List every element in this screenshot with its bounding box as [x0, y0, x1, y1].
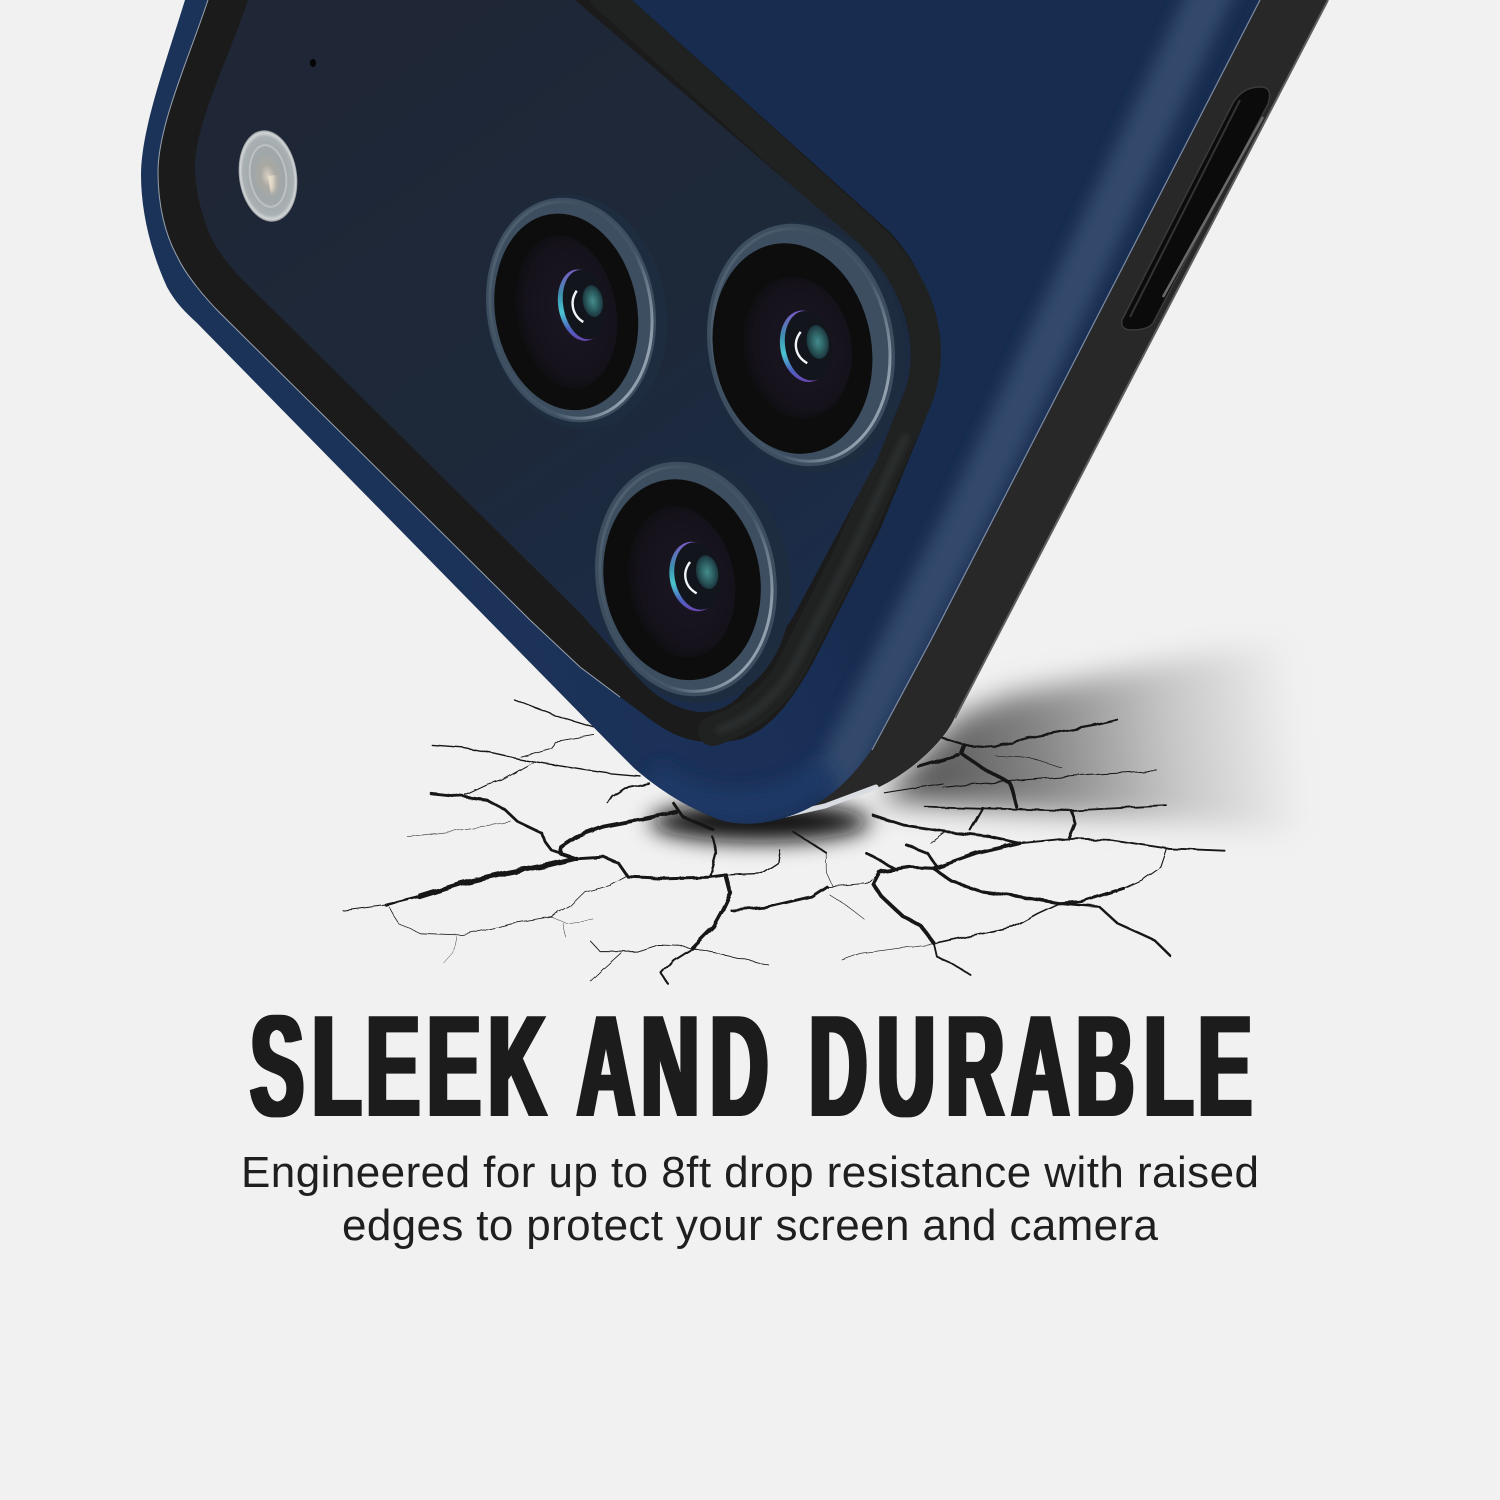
crack: heavy short in shadow	[919, 755, 958, 767]
blue case highlight bands	[650, 0, 1226, 806]
crack: bottom hairline	[591, 953, 622, 982]
crack: upper right arm	[943, 720, 1117, 747]
crack: bottom web	[591, 942, 769, 965]
inner glass	[504, 227, 629, 396]
camera lens bottom	[574, 441, 810, 719]
white arc	[570, 291, 583, 323]
coloured crescent	[774, 306, 836, 386]
subtitle line 2: edges to protect your screen and camera	[342, 1201, 1159, 1250]
crack: thin horizontals in shadow	[885, 771, 1157, 793]
subtitle line 1: Engineered for up to 8ft drop resistance with raised	[241, 1148, 1259, 1197]
crack: connector down left	[466, 763, 533, 795]
ring highlight	[583, 453, 789, 705]
crack: impact debris	[674, 803, 713, 830]
crack: left arm taper	[386, 897, 420, 905]
title text: SLEEK AND DURABLE	[250, 985, 1252, 1147]
crack: right cell left side	[873, 867, 934, 943]
bumper lighter ridge	[720, 438, 905, 730]
lens element	[780, 307, 837, 384]
teal core	[804, 323, 832, 361]
coloured crescent	[552, 266, 610, 345]
microphone hole	[310, 59, 316, 67]
crack: short centre	[793, 832, 827, 853]
side wall outer edge highlight	[955, 0, 1328, 718]
metal ring	[688, 209, 914, 481]
crack: right cell bottom tail	[934, 943, 971, 975]
crack: bottom spur	[661, 948, 692, 983]
crack: left arm tip	[343, 905, 386, 911]
button inner sheen	[1130, 100, 1240, 317]
crack: horizontal in shadow	[925, 806, 1166, 811]
camera lens right	[688, 206, 925, 488]
crack: right large cell outer thin	[1124, 848, 1166, 888]
black barrel	[696, 230, 889, 467]
glint	[552, 266, 611, 345]
crack: verticals in shadow	[971, 808, 1075, 838]
button outer highlight	[1163, 117, 1263, 297]
flash core	[262, 158, 276, 193]
flash disc	[233, 126, 303, 226]
black barrel	[479, 202, 653, 422]
crack: right large cell outer	[1059, 888, 1124, 903]
crack: middle arc thin end	[827, 872, 879, 887]
flash	[233, 126, 303, 226]
ring highlight	[694, 214, 908, 476]
crack: small connector	[931, 832, 946, 843]
blue case body	[141, 0, 1260, 824]
crack: right cell top edge	[909, 867, 1059, 903]
crack: from contact to right	[873, 815, 1020, 843]
metal ring	[469, 184, 673, 436]
camera lens top left	[467, 180, 686, 444]
crack: horizontal continuation	[1020, 838, 1225, 851]
crack: vertical heavy down	[692, 875, 731, 948]
metal ring	[577, 447, 795, 711]
crack: long left branch	[432, 745, 640, 776]
right edge light band	[830, 0, 1226, 790]
lens element	[669, 538, 726, 613]
crack: hairline spurs	[444, 917, 594, 963]
crack: short diagonals centre right	[866, 845, 937, 870]
crack: connector left	[521, 735, 594, 757]
crack: lower left web	[389, 875, 628, 935]
ring highlight	[473, 189, 669, 431]
crack: thick horizontal right	[934, 843, 1020, 868]
crack: right lower tail	[1059, 903, 1170, 955]
cast shadow of phone	[880, 640, 1300, 835]
black barrel	[588, 467, 776, 693]
phone with case	[141, 0, 1328, 824]
side button	[1122, 87, 1270, 330]
button body	[1122, 87, 1270, 330]
crack: vertical from impact	[710, 837, 717, 877]
crack: thin upper left	[514, 700, 594, 727]
contact shadow under phone	[650, 802, 870, 842]
teal core	[693, 554, 721, 591]
crack: main vertical in shadow	[961, 745, 1016, 807]
coloured crescent	[664, 538, 725, 615]
light sliver at base of side wall	[785, 787, 876, 815]
crack: impact to junction	[560, 812, 677, 858]
inner glass	[732, 268, 863, 427]
black bumper around camera plate	[158, 0, 937, 742]
crack: middle to right stub	[726, 850, 780, 875]
crack: right cell lower edge	[937, 903, 1059, 943]
white arc	[683, 562, 697, 595]
cracked ground	[343, 700, 1225, 983]
bumper outer hairline	[158, 0, 620, 697]
bumper upper band tone	[604, 0, 926, 731]
black side wall	[785, 0, 1328, 816]
right blue edge hairline	[872, 0, 1260, 750]
teal core	[580, 284, 605, 319]
crack: junction to middle	[576, 857, 726, 878]
crack network	[343, 700, 1225, 983]
white arc	[793, 332, 807, 365]
crack: short hook near phone	[608, 783, 649, 803]
crack: faint left spur	[407, 822, 511, 837]
crack: hairline centre	[827, 853, 863, 918]
bottom glow	[650, 770, 830, 806]
crack: faint lower tail	[842, 943, 937, 960]
crack: faint upper right	[995, 755, 1062, 768]
crack: left heavy curve	[431, 793, 576, 858]
crack: middle arc	[732, 887, 827, 911]
lens element	[558, 266, 611, 343]
glint	[664, 537, 726, 615]
camera plate	[195, 0, 911, 712]
lens haze	[467, 180, 686, 444]
glint	[774, 306, 837, 386]
inner glass	[616, 498, 747, 666]
lens haze	[574, 441, 810, 719]
flash concentric ring	[246, 143, 290, 209]
crack: thickest left arm	[420, 858, 576, 897]
lens haze	[688, 206, 925, 488]
